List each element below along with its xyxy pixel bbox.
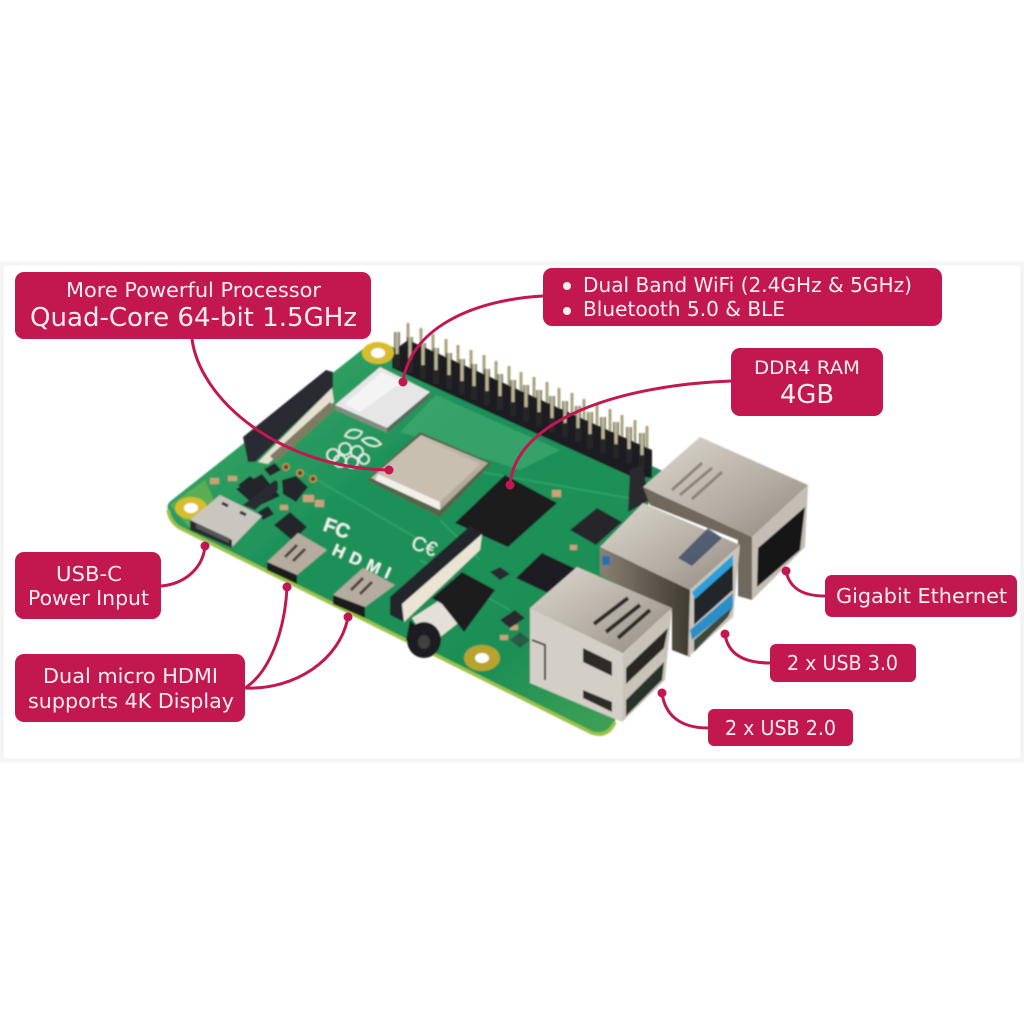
USB 3.0 stack <box>600 503 740 657</box>
callout: processor <box>15 272 371 339</box>
ethernet controller chip <box>570 508 622 545</box>
front row GPIO pins <box>397 332 642 469</box>
micro HDMI port 2 <box>333 568 395 618</box>
callout: USB-C <box>15 552 161 619</box>
callout: USB-C: USB-C <box>56 562 122 586</box>
leader: USB 3.0 <box>722 631 770 663</box>
back row GPIO pins <box>408 323 647 456</box>
board <box>168 342 665 734</box>
small parts <box>490 465 650 648</box>
CPU <box>367 432 492 517</box>
leader: USB 2.0 <box>659 690 708 728</box>
leader: wifi <box>400 296 543 385</box>
mounting hole bottom <box>464 645 500 671</box>
copper trace lines <box>300 470 640 610</box>
audio jack <box>406 572 495 658</box>
small capacitors <box>210 476 577 640</box>
callout: processor: Quad-Core 64-bit 1.5GHz <box>30 303 357 333</box>
leader: RAM <box>507 381 731 488</box>
callout: ethernet <box>825 575 1017 617</box>
display connector <box>390 526 482 622</box>
gold test pads <box>283 464 316 482</box>
callout: ethernet: Gigabit Ethernet <box>836 584 1007 608</box>
USB-C port <box>190 495 262 548</box>
mounting hole left <box>175 497 207 519</box>
mounting hole top <box>362 342 394 364</box>
callout: wireless <box>543 268 942 326</box>
leader: HDMI <box>245 584 351 688</box>
GPIO header base <box>392 340 652 478</box>
callout: USB 2.0 <box>708 709 853 746</box>
callout: USB 3.0: 2 x USB 3.0 <box>787 651 898 675</box>
board edge <box>168 510 615 734</box>
leader: ethernet <box>783 568 825 596</box>
callout: USB 2.0: 2 x USB 2.0 <box>725 716 836 740</box>
USB 2.0 stack <box>530 567 672 722</box>
board text: FC mark: FC <box>320 514 353 544</box>
Ethernet jack <box>643 437 808 600</box>
RAM chip <box>455 475 557 547</box>
Raspberry Pi board photo <box>168 323 808 734</box>
callout: RAM <box>731 348 883 416</box>
callout: USB 3.0 <box>770 644 916 682</box>
micro HDMI port 1 <box>267 533 327 584</box>
callout: USB-C: Power Input <box>28 586 149 610</box>
light highlight near wifi <box>400 395 560 470</box>
callout: HDMI: Dual micro HDMI <box>43 664 218 688</box>
callout: wireless: Bluetooth 5.0 & BLE <box>583 297 785 321</box>
callout: RAM: DDR4 RAM <box>754 357 860 379</box>
callout: HDMI <box>15 654 245 722</box>
board text: HDMI: HDMI <box>329 540 394 583</box>
callout: processor: More Powerful Processor <box>66 278 322 302</box>
leader: USB-C <box>161 543 208 586</box>
panel frame <box>2 264 1022 760</box>
callout: HDMI: supports 4K Display <box>28 689 234 713</box>
leader: processor <box>192 339 392 473</box>
callout: wireless: Dual Band WiFi (2.4GHz & 5GHz) <box>583 273 912 297</box>
camera connector <box>243 370 336 464</box>
wifi module <box>335 367 430 433</box>
raspberry logo <box>327 430 381 468</box>
usb controller chip <box>516 553 578 594</box>
callout: RAM: 4GB <box>780 380 834 410</box>
board text: CE mark: C€ <box>408 532 440 561</box>
lime corner tint <box>170 480 225 528</box>
power components <box>236 463 308 541</box>
